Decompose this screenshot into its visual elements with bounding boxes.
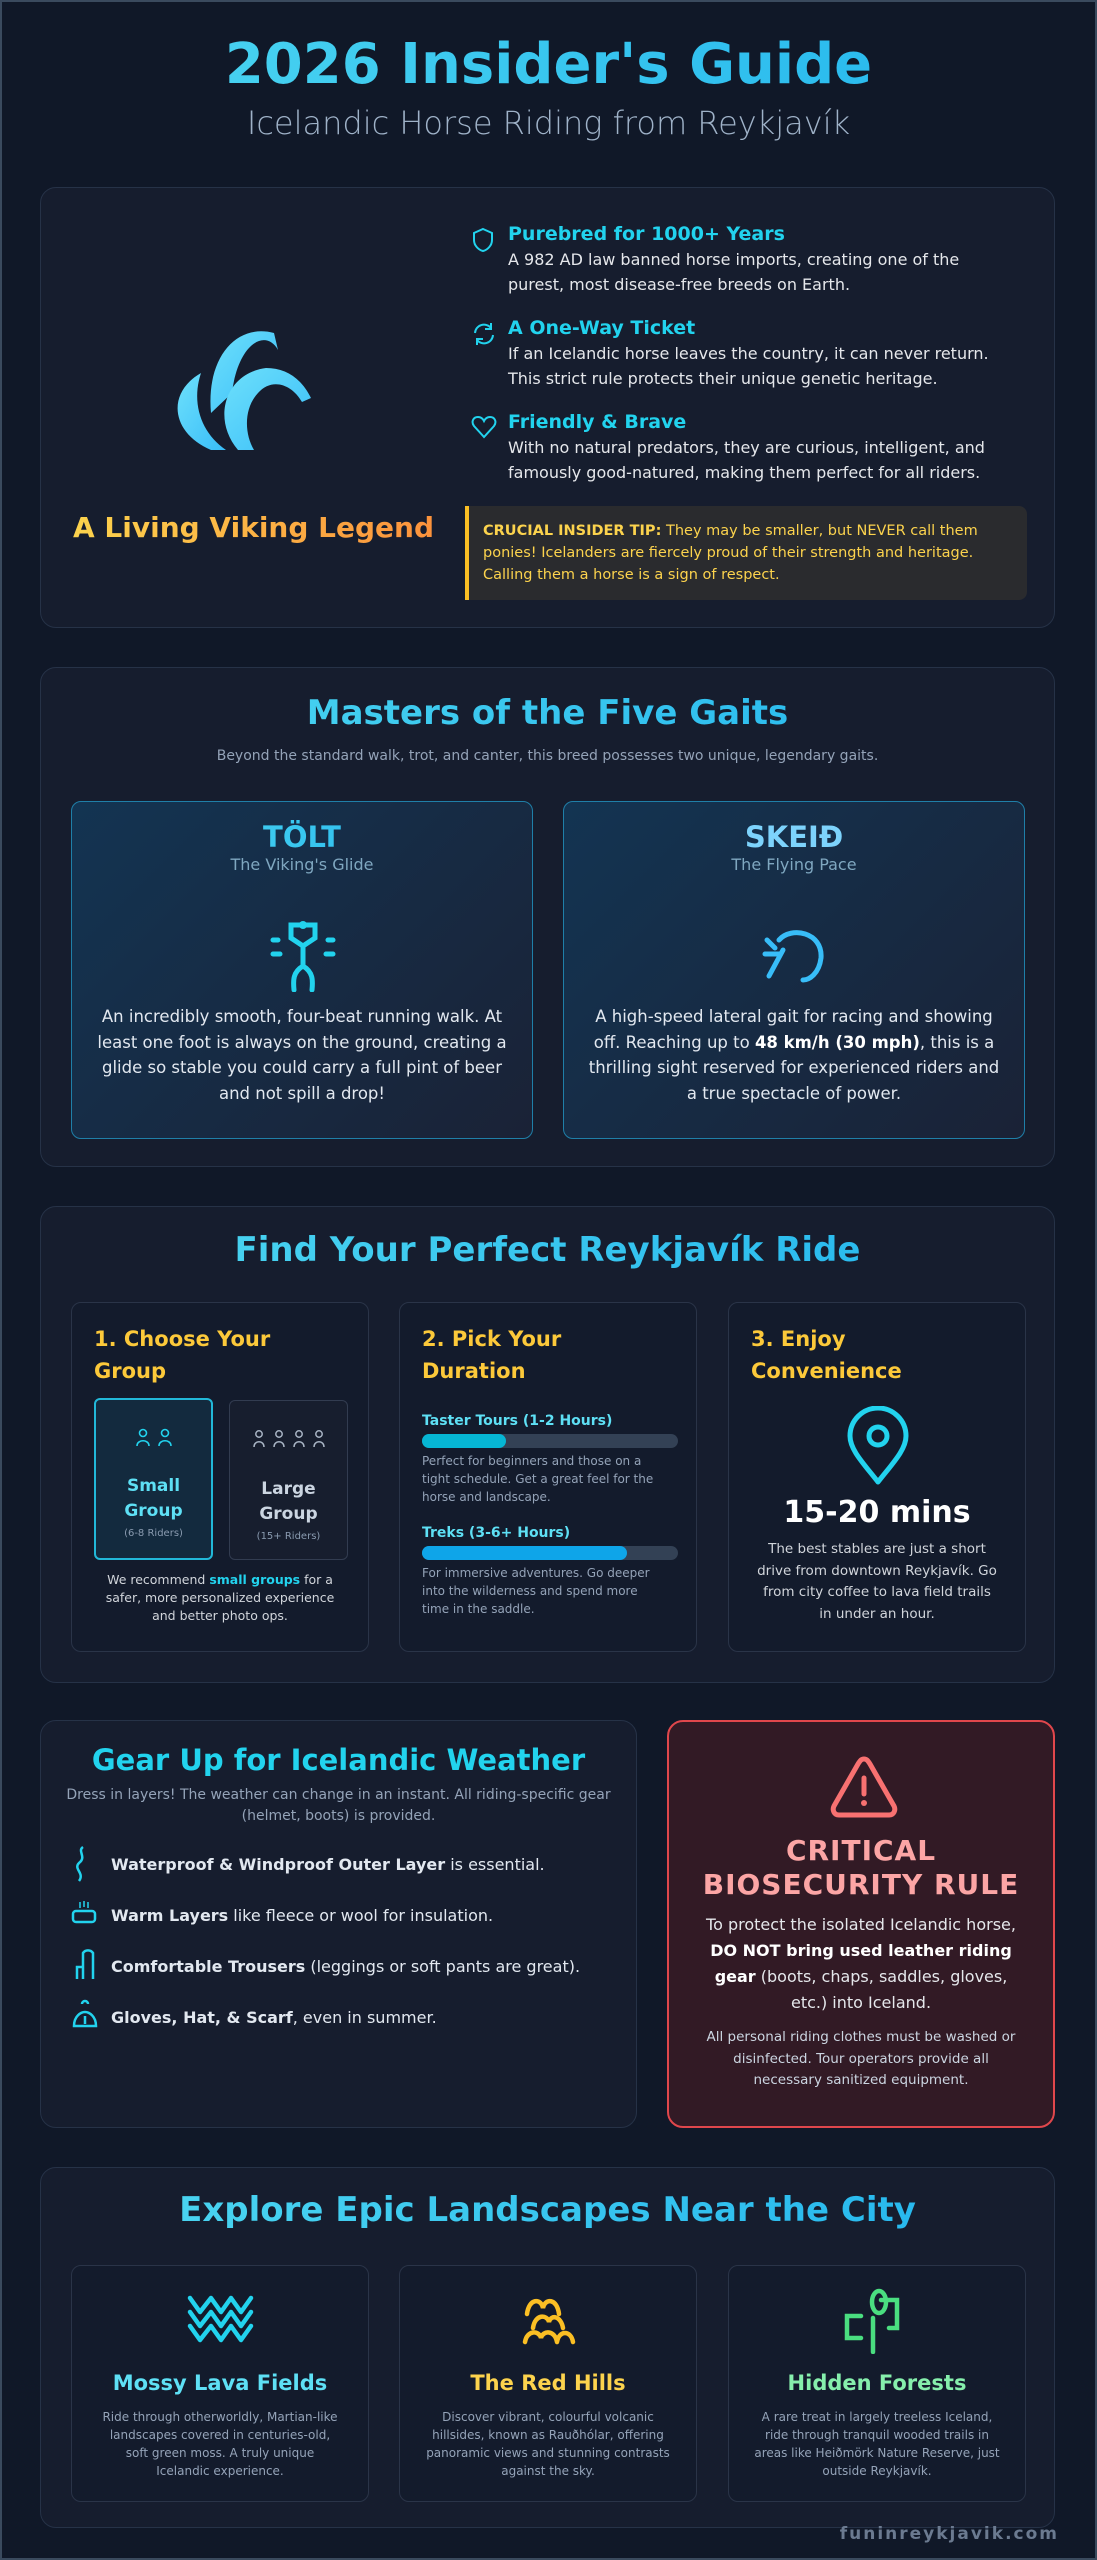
card: tolt: An incredibly smooth, four-beat running walk. At least one foot is always on the ground, creating a glide so stable you could carry a full pint of beer and not spill a drop! — [97, 1007, 507, 1102]
item: outer layer: Waterproof & Windproof Outer Layer is essential. — [111, 1855, 545, 1874]
title — [0, 30, 1097, 100]
card: choose group: 1. Choose Your — [94, 1327, 270, 1351]
heading: CRITICAL — [786, 1834, 936, 1867]
card: duration: 2. Pick Your — [422, 1327, 561, 1351]
icon: warning — [830, 1756, 898, 1818]
item: outer layer — [76, 1846, 545, 1882]
bar: treks: Treks (3-6+ Hours) — [422, 1525, 570, 1541]
card: convenience: 15-20 mins — [783, 1495, 971, 1530]
card: lava fields: Mossy Lava Fields — [113, 2371, 327, 2395]
item: warm layers: Warm Layers like fleece or wool for insulation. — [111, 1906, 493, 1925]
panel: landscapes — [40, 2167, 1055, 2528]
icon: map pin — [848, 1406, 908, 1484]
card: convenience — [728, 1302, 1026, 1652]
icon: heart — [472, 416, 496, 438]
heading: a living viking legend: A Living Viking Legend — [73, 511, 434, 544]
panel: gear up — [40, 1720, 637, 2128]
fact: friendly & brave: With no natural predators, they are curious, intelligent, and famously good-natured, making them perfect for all riders. — [508, 438, 985, 482]
icon: horse logo — [178, 331, 311, 450]
heading: Find Your Perfect Reykjavík Ride — [235, 1230, 860, 1270]
card: red hills: Discover vibrant, colourful volcanic hillsides, known as Rauðhólar, offering panoramic views and stunning contrasts against the sky. — [426, 2410, 670, 2478]
card: skeid: The Flying Pace — [731, 855, 857, 874]
card: convenience: The best stables are just a short drive from downtown Reykjavík. Go from city coffee to lava field trails in under an hour. — [757, 1541, 997, 1622]
heading: Gear Up for Icelandic Weather — [92, 1743, 585, 1777]
item: gloves hat scarf — [72, 2000, 437, 2028]
fact: one-way ticket: A One-Way Ticket — [508, 317, 695, 339]
panel: five gaits — [40, 667, 1055, 1167]
large group option: Group — [259, 1504, 318, 1524]
panel: biosecurity — [667, 1720, 1055, 2128]
bar: taster: Taster Tours (1-2 Hours) — [422, 1413, 612, 1429]
heading — [41, 693, 1054, 733]
card: choose group: We recommend small groups for a safer, more personalized experience and better photo ops. — [106, 1572, 334, 1623]
heading: Masters of the Five Gaits — [307, 693, 788, 733]
fact: friendly & brave — [472, 411, 985, 482]
card: tolt: TÖLT — [263, 820, 341, 854]
large group option — [229, 1400, 348, 1560]
fact: purebred — [473, 223, 959, 294]
fact: one-way ticket: If an Icelandic horse leaves the country, it can never return. This strict rule protects their unique genetic heritage. — [508, 344, 989, 388]
bar: treks — [422, 1525, 678, 1616]
icon: hills — [522, 2298, 576, 2344]
card: duration: Duration — [422, 1359, 526, 1383]
card: forests: A rare treat in largely treeless Iceland, ride through tranquil wooded trails in areas like Heiðmörk Nature Reserve, just outside Reykjavík. — [754, 2410, 1000, 2478]
item: trousers — [76, 1949, 580, 1979]
card: forests: Hidden Forests — [788, 2371, 966, 2395]
bar: taster: Perfect for beginners and those on a tight schedule. Get a great feel for the horse and landscape. — [422, 1454, 653, 1504]
card: tolt: The Viking's Glide — [230, 855, 374, 874]
card: lava fields: Ride through otherworldly, Martian-like landscapes covered in centuries-old, soft green moss. A truly unique Icelandic experience. — [102, 2410, 338, 2478]
fact: friendly & brave: Friendly & Brave — [508, 411, 686, 433]
panel: living viking legend — [40, 187, 1055, 628]
icon: rider — [270, 921, 336, 992]
large group option: Large — [261, 1479, 316, 1499]
heading: Explore Epic Landscapes Near the City — [179, 2190, 916, 2230]
footer: site url: funinreykjavik.com — [840, 2524, 1059, 2544]
icon: shield — [473, 228, 493, 252]
icon: speed — [762, 930, 824, 982]
card: forests — [728, 2265, 1026, 2502]
callout: insider tip — [465, 506, 1027, 600]
card: convenience: 3. Enjoy — [751, 1327, 846, 1351]
bar: treks: For immersive adventures. Go deeper into the wilderness and spend more time in the saddle. — [422, 1566, 650, 1616]
heading — [41, 1230, 1054, 1270]
card: tolt — [71, 801, 533, 1139]
bar: taster — [422, 1413, 678, 1504]
card: lava fields — [71, 2265, 369, 2502]
card: skeid — [563, 801, 1025, 1139]
card: choose group: Group — [94, 1359, 166, 1383]
small group option: (6-8 Riders) — [124, 1528, 183, 1539]
card: duration — [399, 1302, 697, 1652]
small group option: Small — [127, 1476, 180, 1496]
subtitle: Beyond the standard walk, trot, and canter, this breed possesses two unique, legendary gaits. — [217, 748, 878, 764]
small group option — [94, 1398, 213, 1560]
subtitle: Dress in layers! The weather can change in an instant. All riding-specific gear (helmet, boots) is provided. — [66, 1787, 611, 1824]
callout: insider tip: CRUCIAL INSIDER TIP: They may be smaller, but NEVER call them ponies! Icelanders are fiercely proud of their strength and heritage. Calling them a horse is a sign of respect. — [483, 523, 978, 583]
card: convenience: Convenience — [751, 1359, 902, 1383]
card: skeid: A high-speed lateral gait for racing and showing off. Reaching up to 48 km/h (30 mph), this is a thrilling sight reserved for experienced riders and a true spectacle of power. — [589, 1007, 999, 1102]
subtitle: Icelandic Horse Riding from Reykjavík — [247, 104, 850, 142]
small group option: Group — [124, 1501, 183, 1521]
card: choose group — [71, 1302, 369, 1652]
panel: find your ride — [40, 1206, 1055, 1683]
card: skeid: SKEIÐ — [745, 820, 843, 854]
card: red hills — [399, 2265, 697, 2502]
list: gear — [72, 1846, 580, 2028]
panel: biosecurity: All personal riding clothes must be washed or disinfected. Tour operators provide all necessary sanitized equipment. — [707, 2029, 1015, 2088]
heading: BIOSECURITY RULE — [703, 1868, 1019, 1901]
heading — [703, 1834, 1019, 1901]
fact: purebred: Purebred for 1000+ Years — [508, 223, 785, 245]
card: red hills: The Red Hills — [470, 2371, 626, 2395]
item: trousers: Comfortable Trousers (leggings or soft pants are great). — [111, 1957, 580, 1976]
fact: purebred: A 982 AD law banned horse imports, creating one of the purest, most disease-free breeds on Earth. — [508, 250, 959, 294]
icon: tree — [844, 2288, 900, 2354]
title: 2026 Insider's Guide — [225, 32, 872, 97]
icon: refresh — [474, 323, 494, 345]
text: To protect the isolated Icelandic horse, DO NOT bring used leather riding gear (boots, chaps, saddles, gloves, etc.) into Iceland. — [706, 1915, 1016, 2012]
large group option: (15+ Riders) — [257, 1531, 320, 1542]
item: gloves hat scarf: Gloves, Hat, & Scarf, even in summer. — [111, 2008, 437, 2027]
fact: one-way ticket — [474, 317, 989, 388]
icon: waves — [188, 2296, 254, 2342]
